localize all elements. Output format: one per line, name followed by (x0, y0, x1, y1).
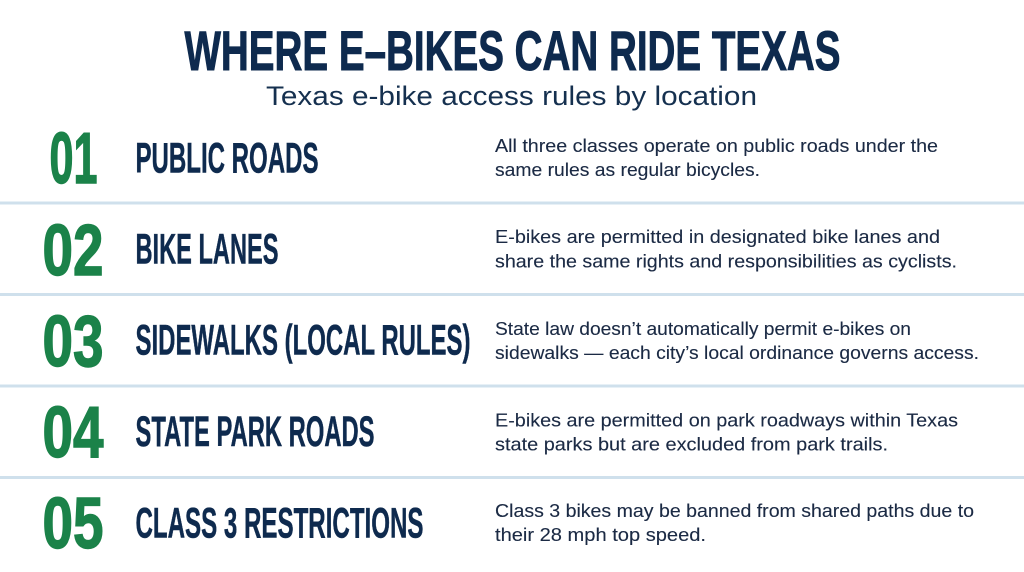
row 1: public roads (50, 119, 938, 199)
row 3: sidewalks (42, 302, 979, 382)
heading: state park roads: STATE PARK ROADS (136, 409, 374, 456)
heading: class 3 restrictions: CLASS 3 RESTRICTIONS (136, 500, 424, 548)
description: state park roads: E-bikes are permitted on park roadways within Texas (495, 410, 958, 430)
description: public roads: same rules as regular bicycles. (495, 159, 760, 180)
row 2: bike lanes (42, 211, 957, 291)
heading: bike lanes: BIKE LANES (136, 226, 278, 274)
heading: sidewalks: SIDEWALKS (LOCAL RULES) (136, 318, 470, 364)
heading: public roads: PUBLIC ROADS (136, 136, 318, 182)
description: class 3 restrictions (495, 500, 974, 545)
number 05: 05 (42, 484, 104, 564)
description: sidewalks (495, 318, 979, 363)
number 01: 01 (50, 119, 98, 199)
description: state park roads (495, 410, 958, 454)
description: sidewalks: sidewalks — each city’s local ordinance governs access. (495, 342, 979, 363)
description: class 3 restrictions: their 28 mph top speed. (495, 524, 706, 545)
number 02: 02 (42, 211, 104, 291)
description: class 3 restrictions: Class 3 bikes may be banned from shared paths due to (495, 500, 974, 521)
row 5: class 3 restrictions (42, 484, 974, 564)
description: public roads: All three classes operate on public roads under the (495, 135, 938, 156)
number 04: 04 (42, 393, 104, 473)
description: bike lanes: share the same rights and responsibilities as cyclists. (495, 250, 957, 272)
description: public roads (495, 135, 938, 180)
description: bike lanes: E-bikes are permitted in designated bike lanes and (495, 226, 940, 247)
description: sidewalks: State law doesn’t automatically permit e-bikes on (495, 318, 911, 339)
number 03: 03 (42, 302, 104, 382)
row 4: state park roads (42, 393, 958, 473)
subtitle: Texas e-bike access rules by location (266, 81, 757, 111)
description: state park roads: state parks but are excluded from park trails. (495, 434, 888, 454)
description: bike lanes (495, 226, 957, 272)
